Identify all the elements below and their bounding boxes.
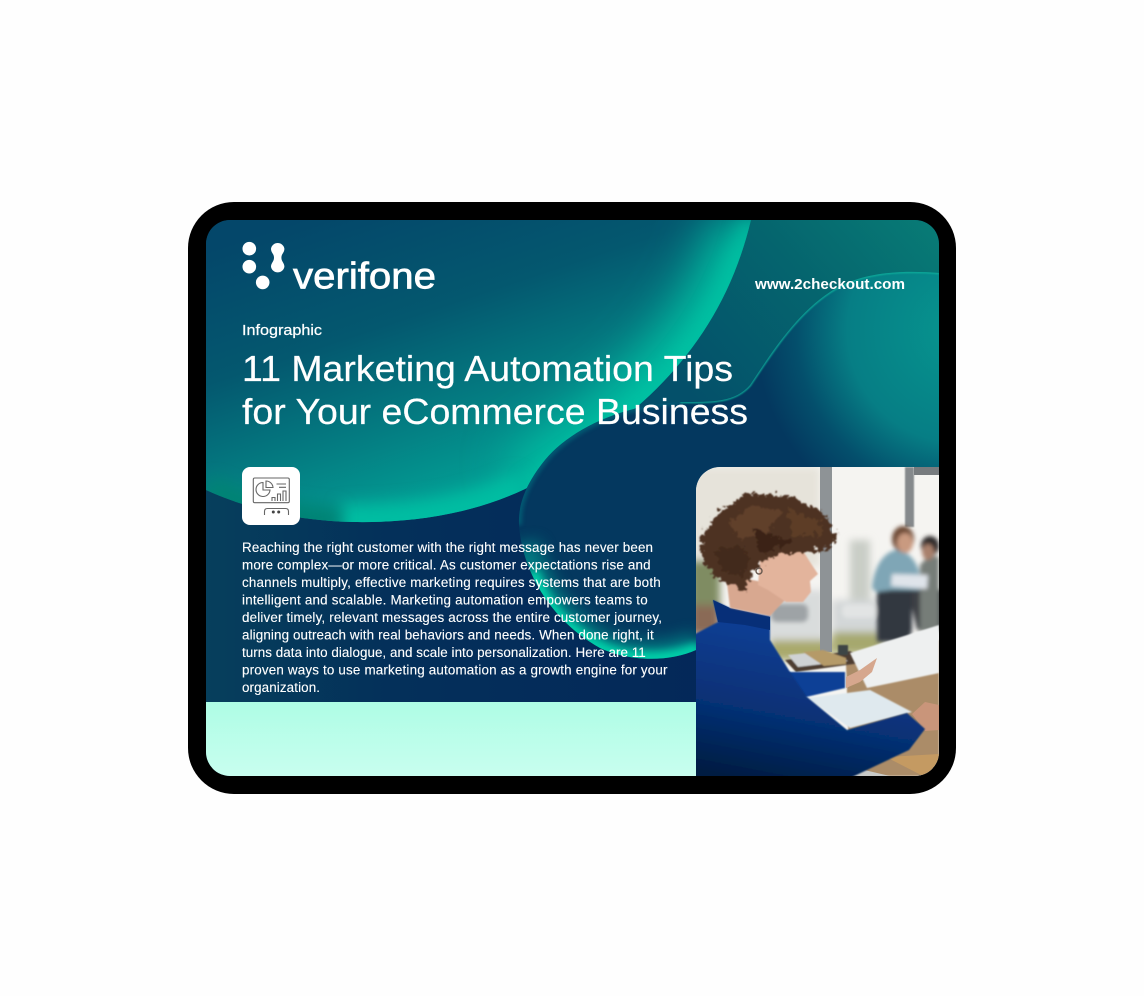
panel: gradient background [206, 220, 939, 780]
table [846, 640, 939, 776]
intro paragraph: channels multiply, effective marketing requires systems that are both [242, 575, 661, 590]
title: for Your eCommerce Business [242, 391, 748, 432]
earring [756, 568, 762, 574]
right hand [912, 702, 939, 731]
device frame [188, 202, 956, 794]
intro paragraph: organization. [242, 680, 320, 695]
neck [726, 575, 785, 616]
eyebrow label: Infographic [242, 322, 323, 339]
infographic tablet card [188, 202, 956, 794]
stacked books [785, 645, 868, 672]
website url: www.2checkout.com [754, 276, 905, 293]
face [758, 546, 818, 602]
icon: dashboard analytics [242, 467, 300, 525]
logo: verifone: verifone [293, 256, 436, 296]
sweater body and arm [680, 600, 925, 778]
left hand [846, 658, 877, 688]
window mullions [820, 467, 832, 652]
intro paragraph: turns data into dialogue, and scale into personalization. Here are 11 [242, 645, 646, 660]
sweater left forearm [785, 672, 845, 697]
mint footer band [206, 702, 697, 776]
title: 11 Marketing Automation Tips [242, 348, 733, 389]
intro paragraph [242, 540, 668, 695]
title [242, 348, 748, 432]
intro paragraph: Reaching the right customer with the right message has never been [242, 540, 653, 555]
intro paragraph: deliver timely, relevant messages across the entire customer journey, [242, 610, 662, 625]
intro paragraph: more complex—or more critical. As customer expectations rise and [242, 558, 651, 572]
curly hair [699, 490, 835, 587]
intro paragraph: intelligent and scalable. Marketing automation empowers teams to [242, 592, 648, 608]
photo: woman reviewing documents at office window [680, 467, 944, 778]
documents on table [850, 625, 939, 688]
logo: verifone [242, 242, 436, 296]
intro paragraph: proven ways to use marketing automation as a growth engine for your [242, 662, 668, 678]
background colleagues [771, 526, 944, 642]
intro paragraph: aligning outreach with real behaviors and needs. When done right, it [242, 628, 654, 642]
